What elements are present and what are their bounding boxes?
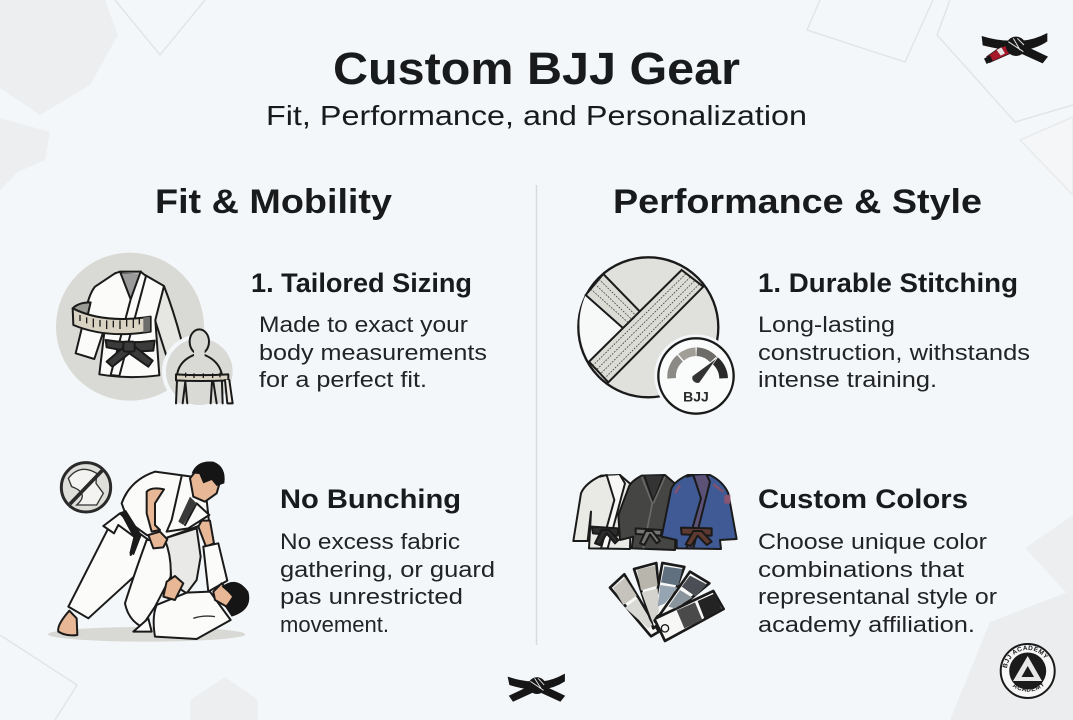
- text block: Custom Colors: Choose unique color: [758, 529, 988, 554]
- badge: BJJ Academy logo: [1000, 643, 1056, 699]
- badge: BJJ Academy logo: ACADEMY: [1012, 682, 1044, 692]
- heading: Fit & Mobility: Fit & Mobility: [155, 183, 392, 221]
- text block: Durable Stitching: 1. Durable Stitching: [758, 268, 1018, 298]
- text block: Durable Stitching: [758, 268, 1030, 392]
- text block: Durable Stitching: Long-lasting: [758, 312, 895, 337]
- icon: black gi: [618, 475, 677, 550]
- text block: Custom Colors: academy affiliation.: [758, 612, 975, 637]
- text block: Custom Colors: Custom Colors: [758, 484, 968, 514]
- text block: Custom Colors: representanal style or: [758, 584, 998, 609]
- text block: Tailored Sizing: 1. Tailored Sizing: [251, 268, 472, 298]
- text block: No Bunching: No Bunching: [280, 484, 461, 514]
- icon: white gi: [573, 475, 632, 549]
- text block: No Bunching: movement.: [280, 612, 389, 637]
- text block: No Bunching: pas unrestricted: [280, 584, 463, 609]
- title: Custom BJJ Gear: [333, 43, 740, 94]
- icon: belt footer: [508, 674, 565, 702]
- text block: Durable Stitching: construction, withstands: [758, 340, 1030, 365]
- icon: belt logo top right: [982, 33, 1048, 64]
- icon: three gi jackets and swatches: [573, 475, 737, 641]
- text block: Tailored Sizing: Made to exact your: [259, 312, 469, 337]
- icon: guard pass illustration: [48, 461, 249, 642]
- text block: Custom Colors: [758, 484, 998, 637]
- icon: colour swatches: [610, 563, 724, 641]
- text block: No Bunching: No excess fabric: [280, 529, 460, 554]
- text block: Tailored Sizing: for a perfect fit.: [259, 367, 427, 392]
- icon: blue gi: [662, 475, 737, 549]
- text block: No Bunching: gathering, or guard: [280, 557, 495, 582]
- icon: durable stitching with gauge: BJJ: [683, 389, 709, 405]
- text block: No Bunching: [280, 484, 495, 637]
- badge: BJJ Academy logo: BJJ ACADEMY: [1002, 646, 1048, 668]
- icon: gi with measuring tape: [56, 253, 237, 409]
- text block: Tailored Sizing: body measurements: [259, 340, 487, 365]
- text block: Custom Colors: combinations that: [758, 557, 965, 582]
- heading: Performance & Style: Performance & Style: [613, 183, 982, 221]
- subtitle: Fit, Performance, and Personalization: [266, 100, 807, 131]
- icon: durable stitching with gauge: [578, 257, 738, 418]
- icon: no bunching sign: [61, 463, 111, 512]
- text block: Tailored Sizing: [251, 268, 487, 392]
- text block: Durable Stitching: intense training.: [758, 367, 937, 392]
